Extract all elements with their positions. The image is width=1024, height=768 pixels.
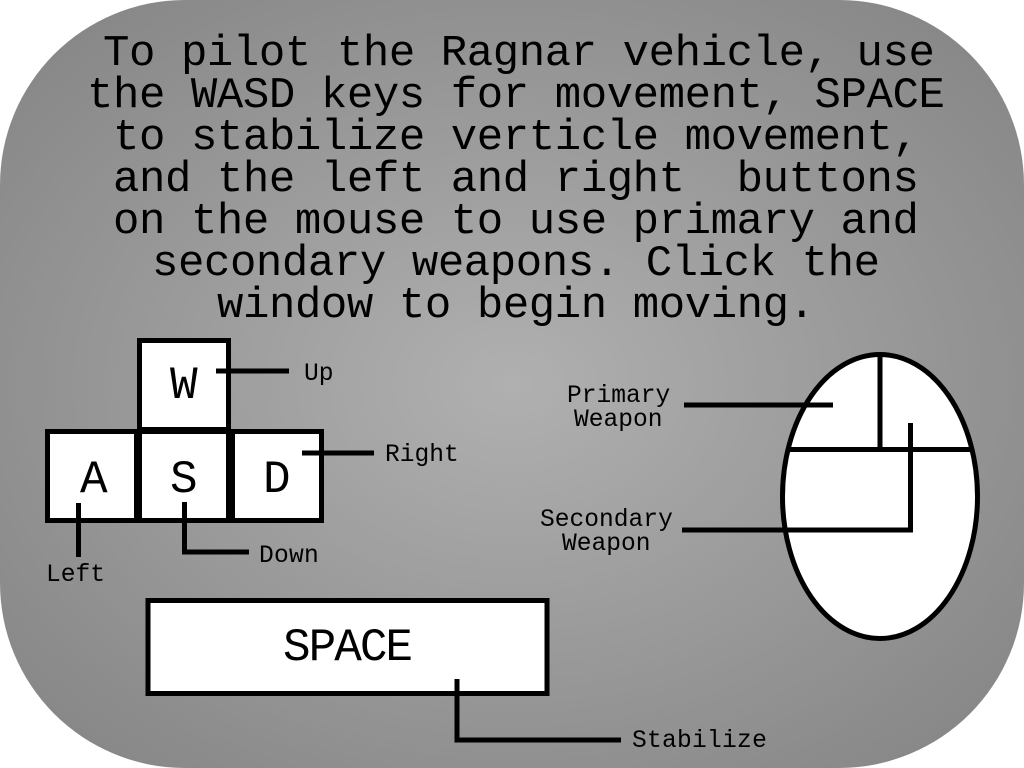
callout: Primary Weapon — [567, 383, 833, 434]
diagram: SPACE key — [148, 600, 767, 755]
key W: W — [170, 360, 198, 412]
key S — [140, 432, 228, 520]
heading: instructions text: the WASD keys for movement, SPACE — [87, 71, 944, 121]
callout: Down: Down — [259, 543, 319, 570]
heading: instructions text: window to begin moving. — [217, 281, 815, 331]
callout: Left: Left — [46, 562, 105, 589]
callout: Left — [46, 503, 105, 589]
callout: Right: Right — [385, 442, 459, 469]
diagram: WASD keys — [46, 340, 459, 589]
callout: Secondary Weapon — [540, 423, 910, 558]
key SPACE — [148, 600, 547, 694]
callout: Secondary Weapon: Weapon — [562, 531, 651, 558]
heading: instructions text: To pilot the Ragnar vehicle, use — [103, 29, 934, 79]
heading: instructions text: secondary weapons. Click the — [152, 239, 880, 289]
callout: Stabilize — [457, 679, 767, 755]
mouse body — [782, 354, 978, 638]
callout: Stabilize: Stabilize — [632, 728, 767, 755]
key A — [48, 432, 136, 520]
callout: Secondary Weapon: Secondary — [540, 507, 673, 534]
key S: S — [170, 454, 198, 506]
callout: Down — [184, 502, 319, 570]
key SPACE: SPACE — [283, 622, 411, 674]
heading: instructions text: to stabilize verticle movement, — [113, 113, 919, 163]
key D: D — [263, 454, 291, 506]
callout: Primary Weapon: Weapon — [574, 407, 663, 434]
heading: instructions text: and the left and right buttons — [113, 155, 919, 205]
heading: instructions text — [87, 29, 944, 331]
key A: A — [80, 454, 108, 506]
key D — [232, 432, 322, 520]
mouse button dividers — [787, 354, 973, 450]
diagram: mouse — [540, 354, 978, 638]
heading: instructions text: on the mouse to use primary and — [113, 197, 919, 247]
callout: Up: Up — [304, 361, 334, 388]
key W — [140, 340, 228, 430]
callout: Up — [216, 361, 334, 388]
callout: Primary Weapon: Primary — [567, 383, 670, 410]
